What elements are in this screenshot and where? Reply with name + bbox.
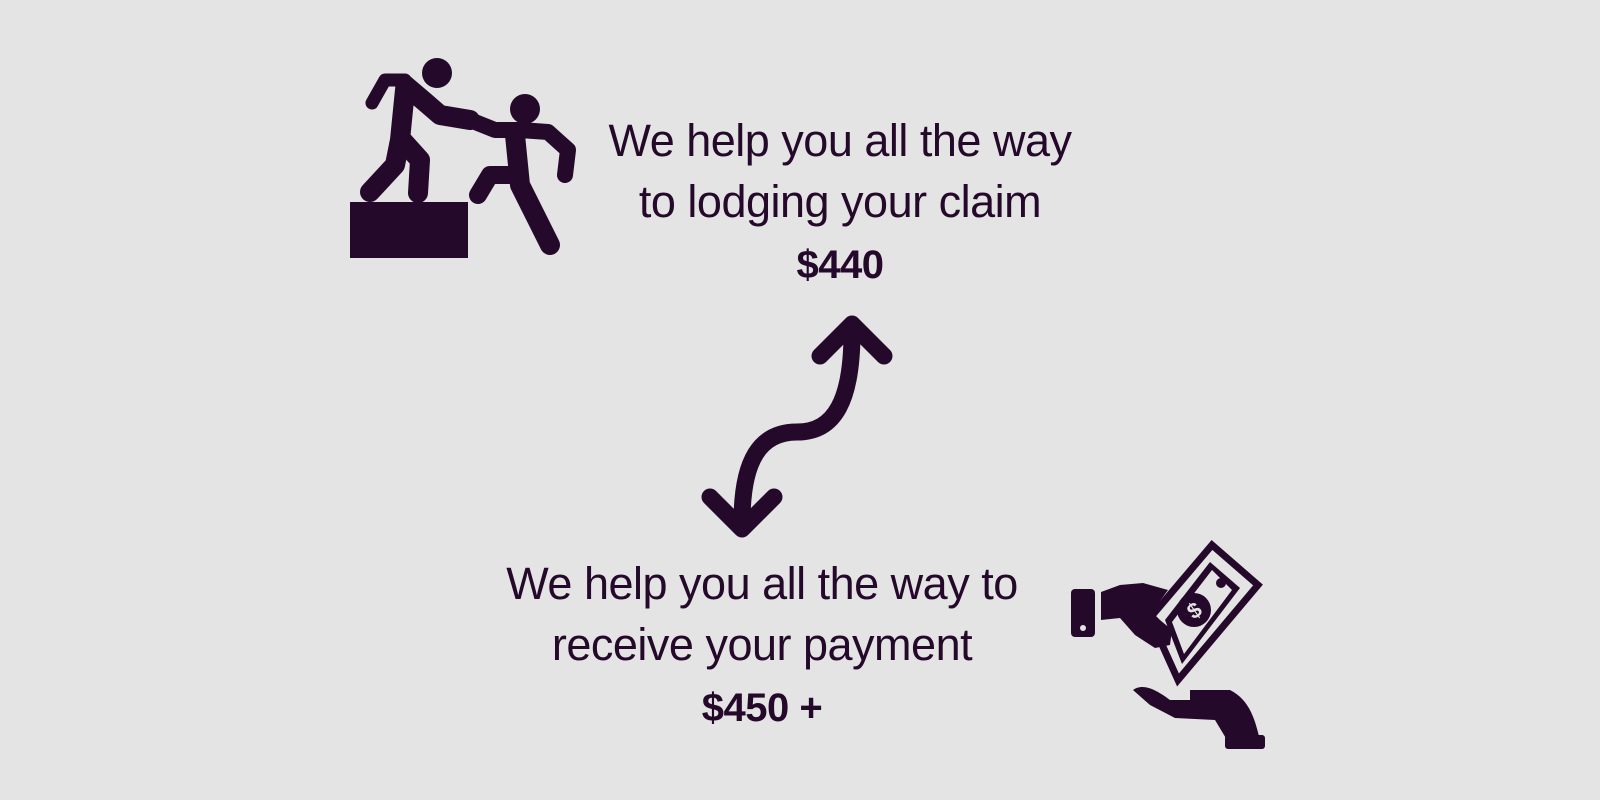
icon: hand giving money: $ xyxy=(1182,597,1206,624)
text block: lodging claim: We help you all the way xyxy=(609,115,1071,166)
icon: hand giving money xyxy=(1071,545,1265,749)
icon: helping hand people on box xyxy=(350,58,568,258)
text block: lodging claim xyxy=(608,115,1072,287)
text block: receive payment: $450 + xyxy=(702,686,822,730)
text block: lodging claim: to lodging your claim xyxy=(639,176,1041,227)
arrow: bidirectional s-curve xyxy=(710,324,884,529)
text block: receive payment: receive your payment xyxy=(552,619,972,670)
text block: lodging claim: $440 xyxy=(796,243,883,287)
text block: receive payment xyxy=(506,558,1018,730)
text block: receive payment: We help you all the way to xyxy=(506,558,1018,609)
